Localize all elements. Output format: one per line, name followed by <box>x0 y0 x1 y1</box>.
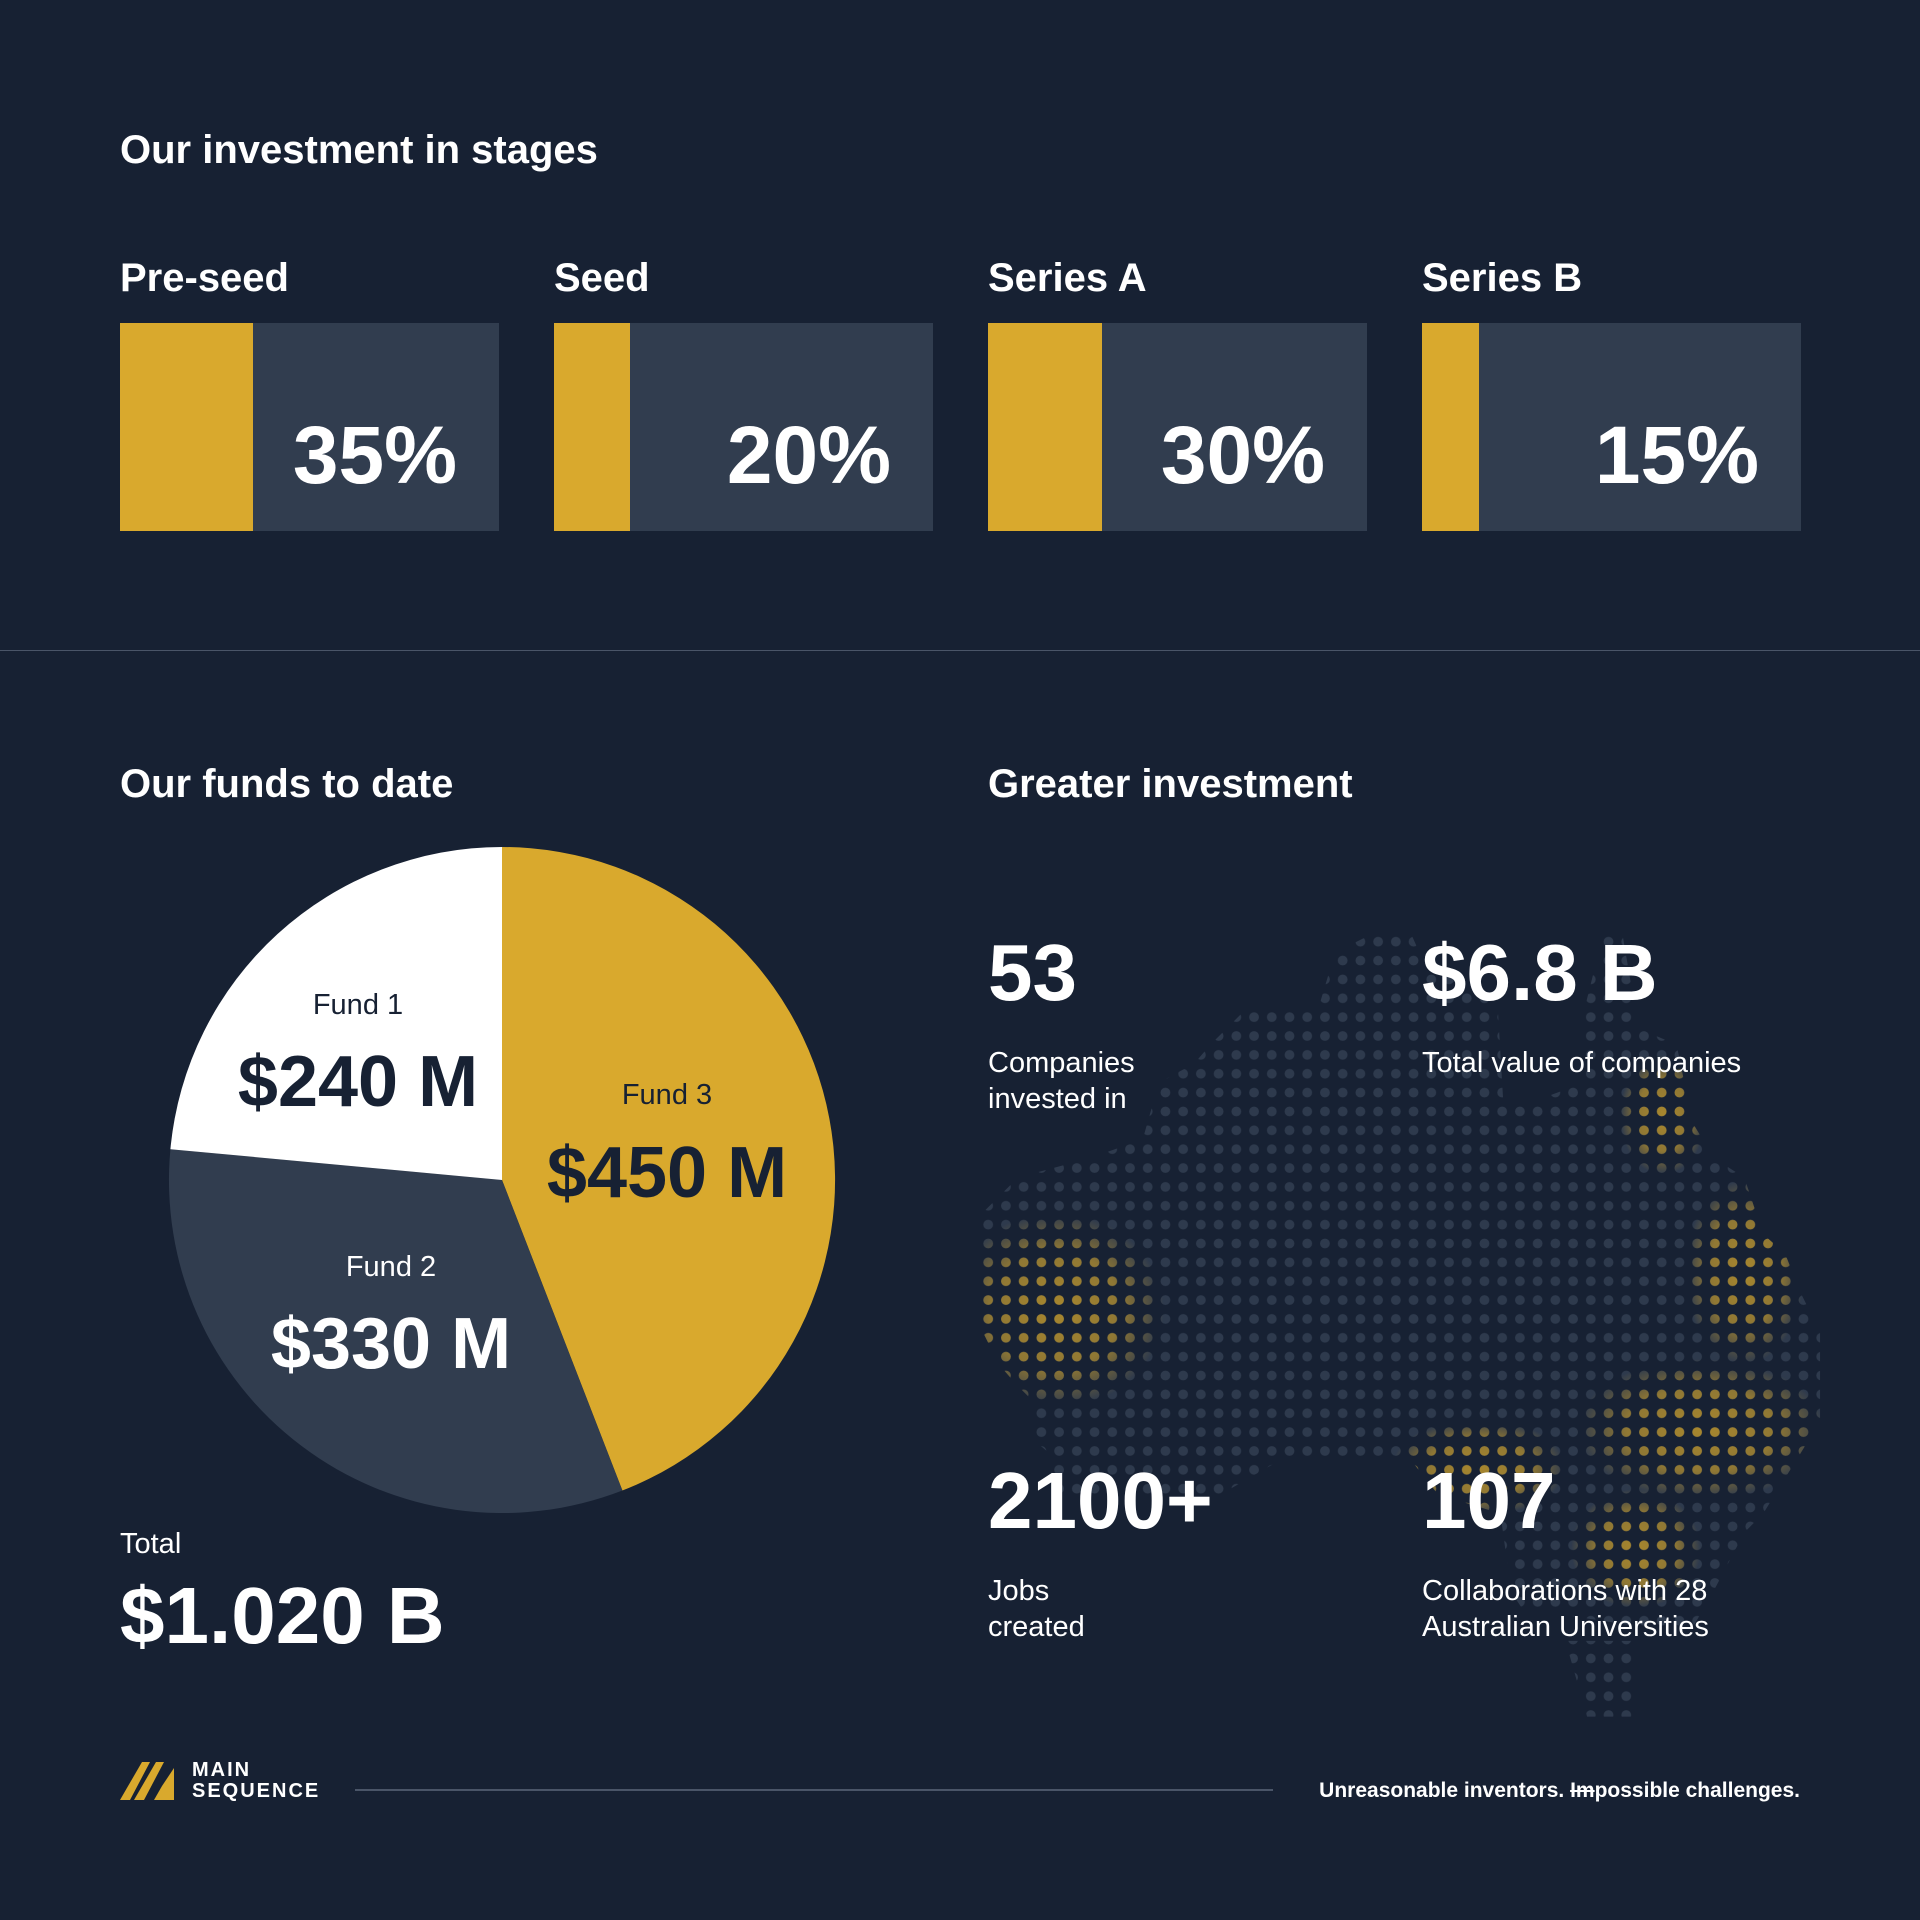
stat: total value: $6.8 B <box>1422 928 1658 1017</box>
pie chart: funds <box>169 847 836 1513</box>
stage: seed <box>554 256 933 531</box>
stage: series B: Series B <box>1422 256 1582 300</box>
map: australia dots <box>983 936 1820 1716</box>
stage: seed: 20% <box>727 410 891 501</box>
stage: pre-seed: Pre-seed <box>120 256 289 300</box>
stage: seed: Seed <box>554 256 650 300</box>
stage: series B <box>1422 256 1801 531</box>
pie chart: funds: Fund 2 <box>346 1251 436 1283</box>
stat: collaborations <box>1422 1456 1709 1643</box>
stat: total value <box>1422 928 1741 1079</box>
stat: companies: invested in <box>988 1083 1127 1115</box>
pie chart: funds: $330 M <box>271 1304 511 1384</box>
stat: companies: 53 <box>988 928 1077 1017</box>
logo: main sequence <box>120 1759 320 1802</box>
stat: total value: Total value of companies <box>1422 1047 1741 1079</box>
total: Total <box>120 1528 181 1560</box>
total: $1.020 B <box>120 1571 445 1660</box>
stage: pre-seed <box>120 256 499 531</box>
title: investment in stages: Our investment in stages <box>120 128 598 172</box>
pie chart: funds: Fund 3 <box>622 1079 712 1111</box>
tagline: Unreasonable inventors. Impossible challenges. <box>1319 1779 1800 1802</box>
stat: jobs <box>988 1456 1213 1643</box>
stat: jobs: Jobs <box>988 1575 1049 1607</box>
heading: funds to date: Our funds to date <box>120 762 453 806</box>
logo: main sequence: MAIN <box>192 1759 251 1781</box>
logo: main sequence: SEQUENCE <box>192 1780 320 1802</box>
stage: pre-seed: 35% <box>293 410 457 501</box>
stat: jobs: created <box>988 1611 1085 1643</box>
stat: companies: Companies <box>988 1047 1135 1079</box>
stat: collaborations: Collaborations with 28 <box>1422 1575 1707 1607</box>
stat: collaborations: Australian Universities <box>1422 1611 1709 1643</box>
stage: series A: Series A <box>988 256 1147 300</box>
pie chart: funds: Fund 1 <box>313 989 403 1021</box>
pie chart: funds: $450 M <box>547 1133 787 1213</box>
pie chart: funds: $240 M <box>238 1042 478 1122</box>
stat: companies <box>988 928 1135 1115</box>
total <box>120 1528 445 1660</box>
stat: jobs: 2100+ <box>988 1456 1213 1545</box>
stat: collaborations: 107 <box>1422 1456 1555 1545</box>
heading: greater investment: Greater investment <box>988 762 1353 806</box>
stage: series A: 30% <box>1161 410 1325 501</box>
stage: series B: 15% <box>1595 410 1759 501</box>
stage: series A <box>988 256 1367 531</box>
